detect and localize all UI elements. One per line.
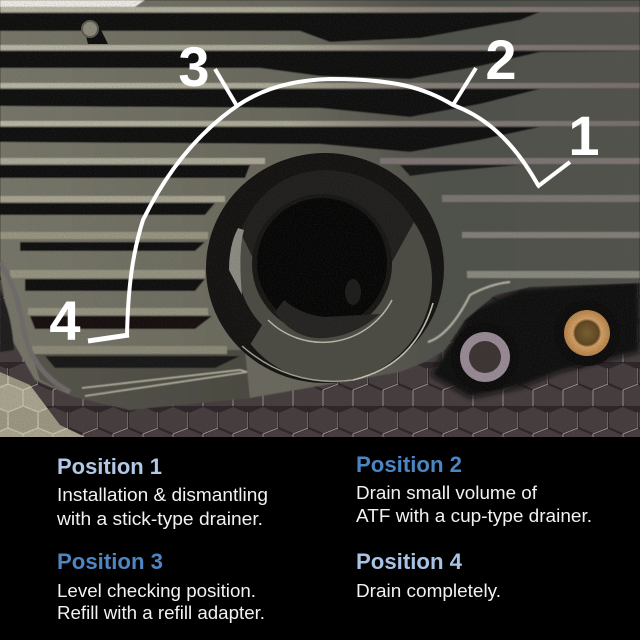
lower flat face: [30, 350, 250, 410]
lower left highlight: [242, 346, 353, 381]
number 1: 1: [568, 104, 600, 167]
legend panel: [56, 452, 592, 623]
bore: [257, 198, 387, 328]
drain port: [206, 153, 444, 383]
position arc overlay: [88, 68, 570, 341]
number 2: 2: [485, 28, 517, 91]
brass recess: [554, 300, 620, 366]
bore tab: [275, 300, 380, 338]
left shine: [229, 228, 244, 295]
tick 1: [537, 162, 570, 187]
tick 4: [88, 335, 129, 341]
stud head: [82, 21, 98, 37]
description: position 3: Level checking position.: [57, 581, 256, 601]
curved lip: [428, 282, 510, 342]
textured seat: [228, 178, 432, 382]
gasket edge: [0, 262, 70, 392]
brass bolt: [554, 300, 620, 366]
position 1 text: [56, 454, 268, 529]
dark recess behind bolts: [430, 280, 640, 398]
position 3 text: [57, 549, 265, 623]
inner lip: [268, 300, 392, 342]
heading: position 2: Position 2: [356, 452, 462, 477]
heading: position 4: Position 4: [356, 549, 463, 574]
arc path: [127, 79, 538, 335]
rails: [0, 7, 640, 12]
small top stud: [82, 21, 108, 44]
tick 2: [453, 68, 476, 105]
description: position 3: Refill with a refill adapter.: [57, 603, 265, 623]
bolt ring: [460, 332, 510, 382]
heading: position 3: Position 3: [57, 549, 163, 574]
hex mat under the pan: [0, 280, 640, 437]
ribbed upper face: [0, 0, 640, 410]
brass ring: [564, 310, 610, 356]
surface grain: [0, 0, 640, 437]
number 4: 4: [49, 289, 81, 352]
description: position 1: with a stick-type drainer.: [56, 509, 263, 529]
shadow of rails: [0, 12, 540, 42]
description: position 2: ATF with a cup-type drainer.: [356, 506, 592, 526]
top-left highlight: [0, 0, 145, 7]
description: position 1: Installation & dismantling: [57, 485, 268, 505]
silver bolt: [451, 323, 519, 391]
description: position 4: Drain completely.: [356, 581, 501, 601]
heading: position 1: Position 1: [57, 454, 162, 479]
position 2 text: [356, 452, 592, 526]
description: position 2: Drain small volume of: [356, 483, 538, 503]
lower right highlight: [353, 303, 433, 380]
dark upper seat: [240, 170, 414, 262]
bore bottom detail: [345, 279, 361, 305]
left black band: [226, 262, 262, 345]
position 4 text: [356, 549, 501, 601]
outer black ring: [206, 153, 444, 383]
pan body: [0, 0, 640, 410]
stud shadow: [86, 28, 108, 44]
light section of hex mat: [0, 372, 85, 437]
tick 3: [215, 69, 237, 106]
bolt recess: [451, 323, 519, 391]
photo: oil pan with drain port: [0, 0, 640, 437]
number 3: 3: [178, 35, 210, 98]
lower lip highlight: [82, 370, 247, 396]
bolt socket: [469, 341, 501, 373]
bore shadow: [252, 194, 392, 334]
